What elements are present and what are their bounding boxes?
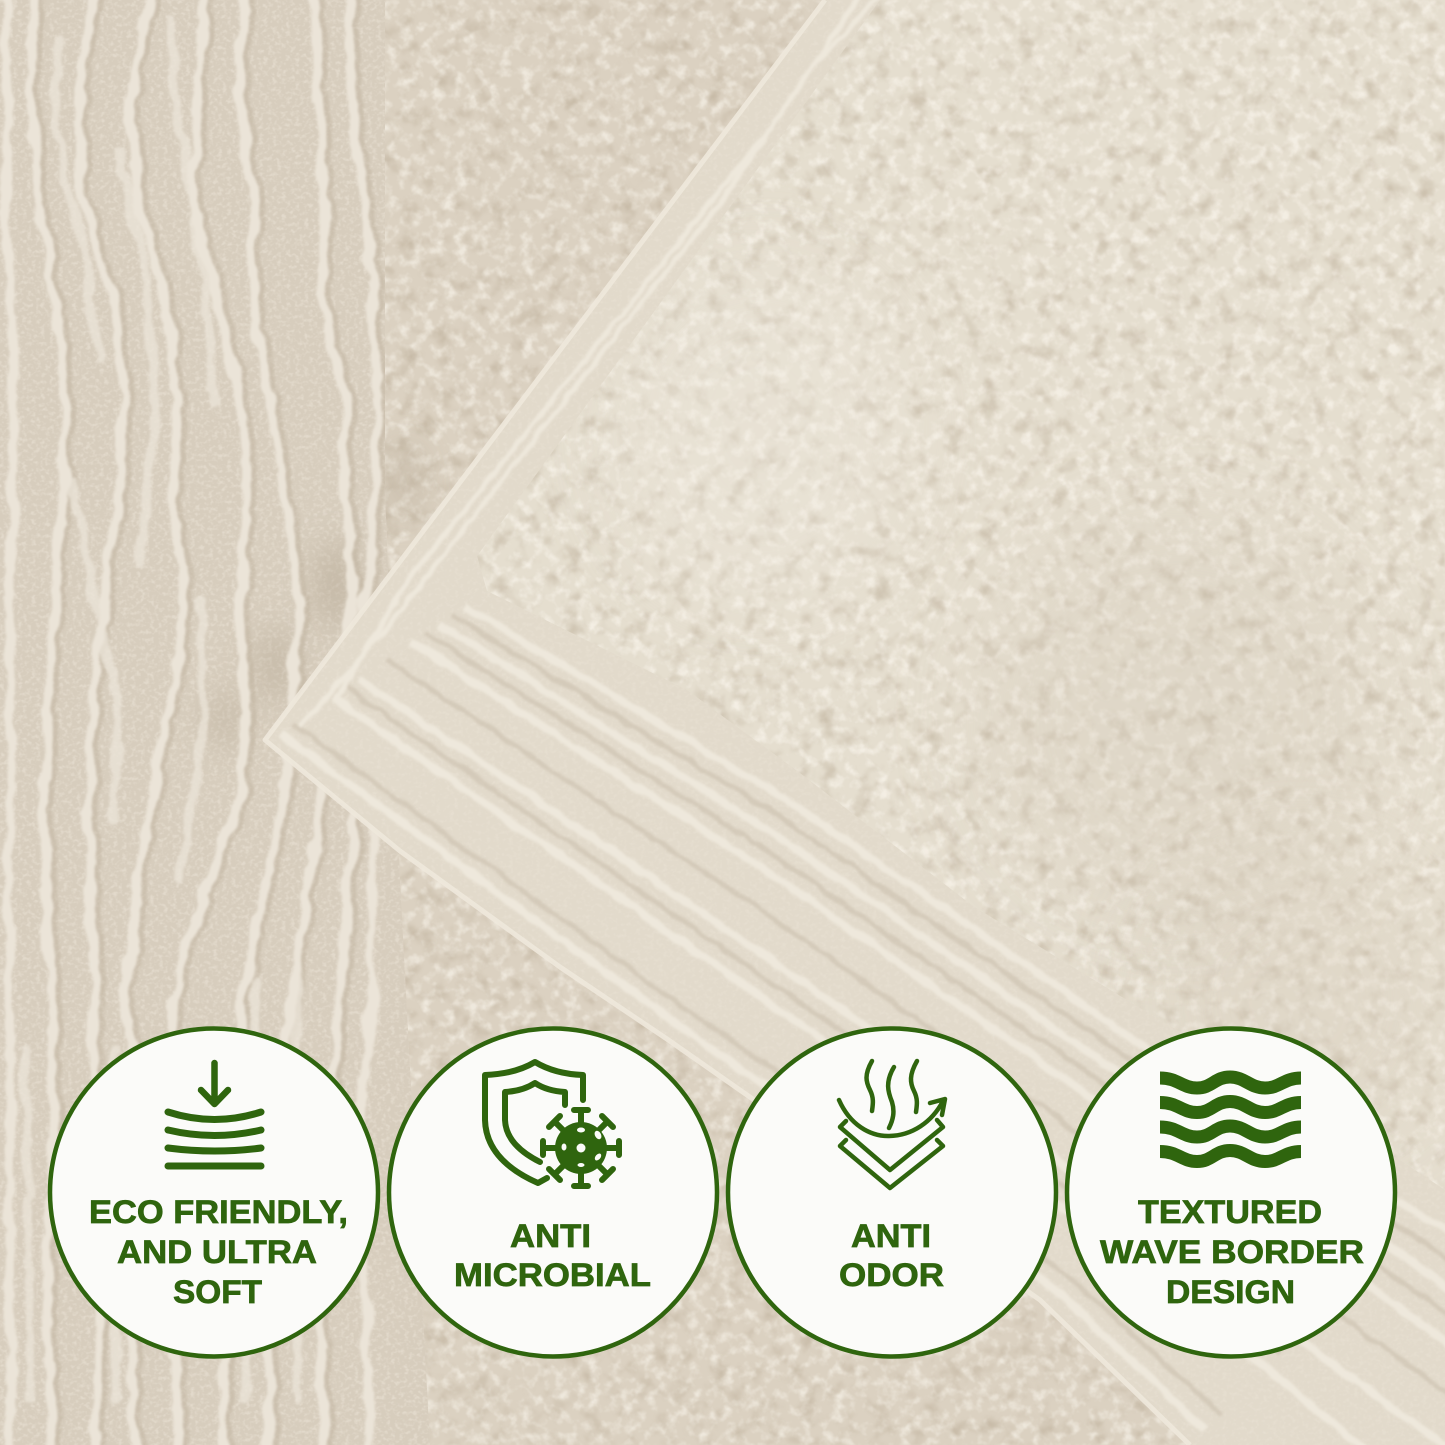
label: textured wave border design: DESIGN <box>1166 1274 1295 1310</box>
fabric: terry towel underneath <box>385 0 1186 1445</box>
badge: anti odor <box>728 1028 1056 1356</box>
label: textured wave border design: TEXTURED <box>1138 1194 1322 1230</box>
fabric: waffle weave panel on left <box>0 0 460 1445</box>
towel plush area <box>470 0 1445 1300</box>
wave border ribs <box>280 606 1445 1445</box>
label: anti odor <box>839 1218 944 1293</box>
label: anti microbial: ANTI <box>510 1218 591 1254</box>
hem stitching along top side <box>300 0 880 727</box>
label: eco friendly, and ultra soft: ECO FRIENDLY, <box>89 1194 348 1230</box>
rib shadows <box>293 615 1445 1414</box>
badge: textured wave border design <box>1067 1028 1395 1356</box>
label: anti microbial: MICROBIAL <box>454 1257 651 1293</box>
icon: shield with virus <box>485 1062 619 1186</box>
label: anti microbial <box>454 1218 651 1293</box>
label: eco friendly, and ultra soft: SOFT <box>173 1274 262 1310</box>
label: eco friendly, and ultra soft: AND ULTRA <box>117 1234 317 1270</box>
label: eco friendly, and ultra soft <box>89 1194 348 1310</box>
icon: compression arrow over layers <box>168 1063 261 1166</box>
badge: eco friendly and ultra soft <box>50 1028 378 1356</box>
label: textured wave border design <box>1100 1194 1364 1310</box>
towel edge highlight <box>265 0 1190 1445</box>
label: textured wave border design: WAVE BORDER <box>1100 1234 1364 1270</box>
icon: odor vapour leaving layers <box>839 1061 945 1188</box>
icon: four waves <box>1160 1077 1301 1162</box>
label: anti odor: ANTI <box>851 1218 931 1254</box>
badge: anti microbial <box>389 1028 717 1356</box>
label: anti odor: ODOR <box>839 1257 944 1293</box>
